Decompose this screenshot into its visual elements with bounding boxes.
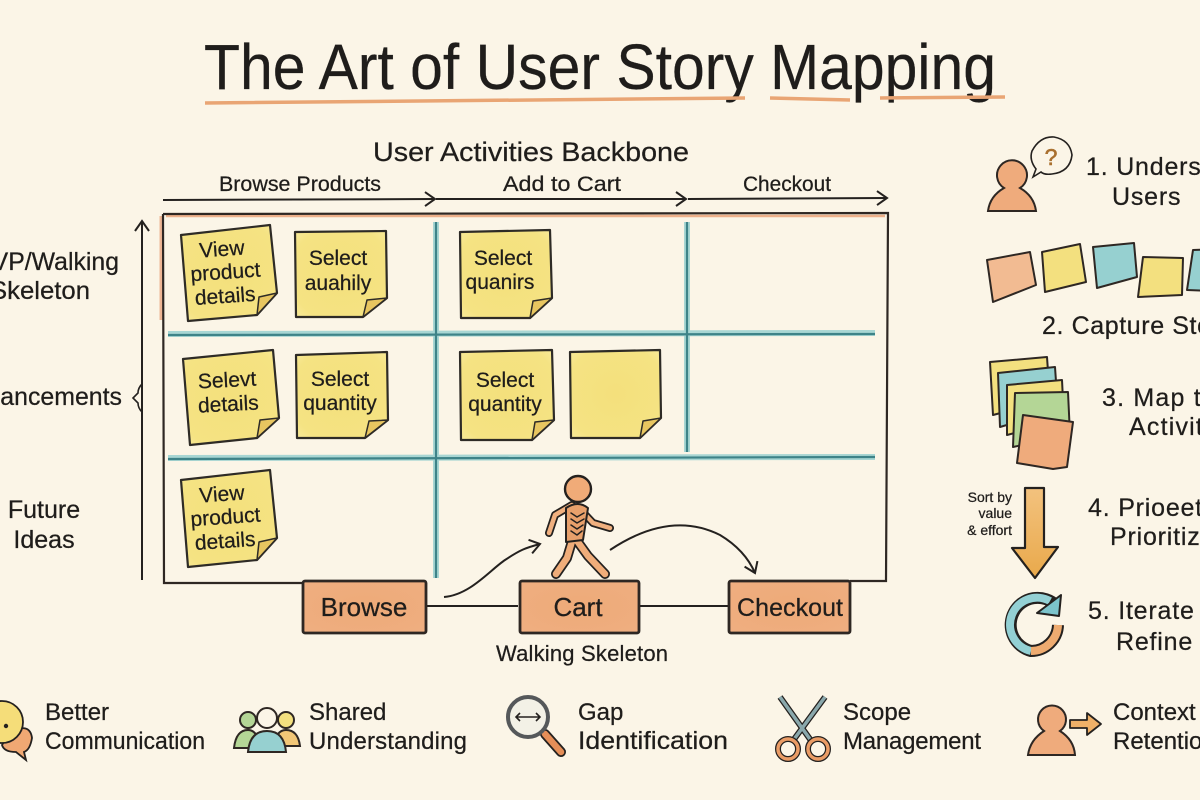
step 3: map to activities	[990, 357, 1200, 469]
box: cart: Cart	[553, 592, 603, 622]
sticky: select details: details	[197, 391, 259, 418]
backbone arrows and labels	[163, 173, 887, 200]
sort note: Sort by	[968, 489, 1012, 505]
sticky: select quantity 3: Select	[311, 368, 369, 391]
sticky: select quantity 4: Select	[476, 369, 534, 392]
benefit: context retention	[1028, 699, 1200, 755]
label	[1088, 494, 1200, 551]
icon: cycle arrow	[1010, 595, 1061, 651]
label: Communication	[45, 728, 205, 755]
label: walking skeleton: Walking Skeleton	[496, 641, 668, 666]
icon: scissors	[778, 697, 828, 759]
sticky: view product details 1: View	[199, 236, 246, 263]
box: browse	[303, 581, 426, 633]
label	[45, 699, 205, 755]
sort note: value	[979, 505, 1012, 521]
sticky: view product details 1: details	[194, 283, 256, 310]
sticky: select quantity 1	[295, 231, 387, 317]
box: checkout	[729, 581, 850, 633]
label	[578, 699, 728, 755]
icon: person with question	[988, 137, 1072, 211]
label	[1102, 384, 1200, 441]
sticky: select quantity 2: Select	[474, 247, 532, 270]
sort note	[967, 489, 1012, 538]
sticky: select quantity 1: auahily	[305, 272, 372, 295]
step 4: prioritize	[967, 488, 1200, 578]
step 1: understand users	[988, 137, 1200, 211]
box: cart	[520, 581, 639, 633]
icon: person with question: ?	[1045, 144, 1057, 170]
label	[843, 699, 981, 755]
row labels: Future	[8, 496, 80, 524]
sticky: view product details 1: product	[190, 258, 261, 286]
step 2: capture stories	[987, 243, 1200, 340]
label	[1113, 699, 1200, 755]
heading: user activities backbone: User Activities Backbone	[373, 137, 689, 167]
icon: sticky stack	[990, 357, 1073, 469]
sticky: select quantity 4	[460, 350, 554, 440]
sort note: & effort	[967, 522, 1012, 538]
label	[309, 699, 467, 755]
title: The Art of User Story Mapping	[204, 31, 996, 103]
benefit: better communication	[0, 699, 205, 760]
backbone arrows and labels: Browse Products	[219, 173, 381, 196]
box: checkout: Checkout	[737, 594, 843, 622]
label	[1086, 153, 1200, 211]
label: Gap	[578, 699, 623, 726]
sticky: blank	[570, 350, 661, 438]
row labels	[0, 248, 122, 554]
box: browse: Browse	[321, 592, 407, 622]
benefit: scope management	[778, 697, 981, 759]
label: Context	[1113, 699, 1196, 726]
sticky: select details: Selevt	[197, 368, 257, 394]
sticky: select quantity 4: quantity	[468, 393, 542, 416]
icon: row of stickies	[987, 243, 1200, 302]
priority axis arrow	[133, 221, 142, 580]
label: Shared	[309, 699, 386, 726]
icon: speech bubbles	[0, 701, 32, 760]
label: Identification	[578, 727, 728, 755]
benefit: gap identification	[508, 697, 728, 755]
label: Management	[843, 728, 981, 755]
sticky: select quantity 3	[296, 352, 388, 438]
sticky: select details	[183, 350, 279, 445]
icon: group of people	[234, 708, 300, 752]
walking skeleton flow	[303, 525, 850, 666]
sticky: select quantity 2	[460, 230, 552, 318]
sticky: select quantity 1: Select	[309, 247, 367, 270]
sticky: view product details 2: details	[194, 528, 256, 555]
label	[1088, 597, 1200, 656]
benefit: shared understanding	[234, 699, 467, 755]
label: Refine	[1116, 628, 1193, 656]
label: Understanding	[309, 728, 467, 755]
story map grid	[161, 213, 888, 583]
icon: magnifier	[508, 697, 561, 752]
backbone arrows and labels: Add to Cart	[503, 173, 621, 196]
sticky: select quantity 2: quanirs	[466, 271, 534, 294]
sticky: view product details 1	[181, 225, 277, 321]
icon: walking figure	[549, 476, 610, 574]
sticky: view product details 2: View	[199, 481, 246, 508]
icon: down arrow	[1012, 488, 1058, 578]
sticky: view product details 2	[181, 470, 277, 567]
row labels: Ideas	[13, 526, 75, 554]
label: Better	[45, 699, 109, 726]
icon: person with arrow	[1028, 706, 1101, 755]
label: Scope	[843, 699, 911, 726]
step 5: iterate and refine	[1010, 595, 1200, 656]
sticky: select quantity 3: quantity	[303, 392, 377, 415]
backbone arrows and labels: Checkout	[743, 173, 831, 196]
label: Users	[1112, 183, 1181, 211]
sticky: view product details 2: product	[190, 503, 261, 531]
